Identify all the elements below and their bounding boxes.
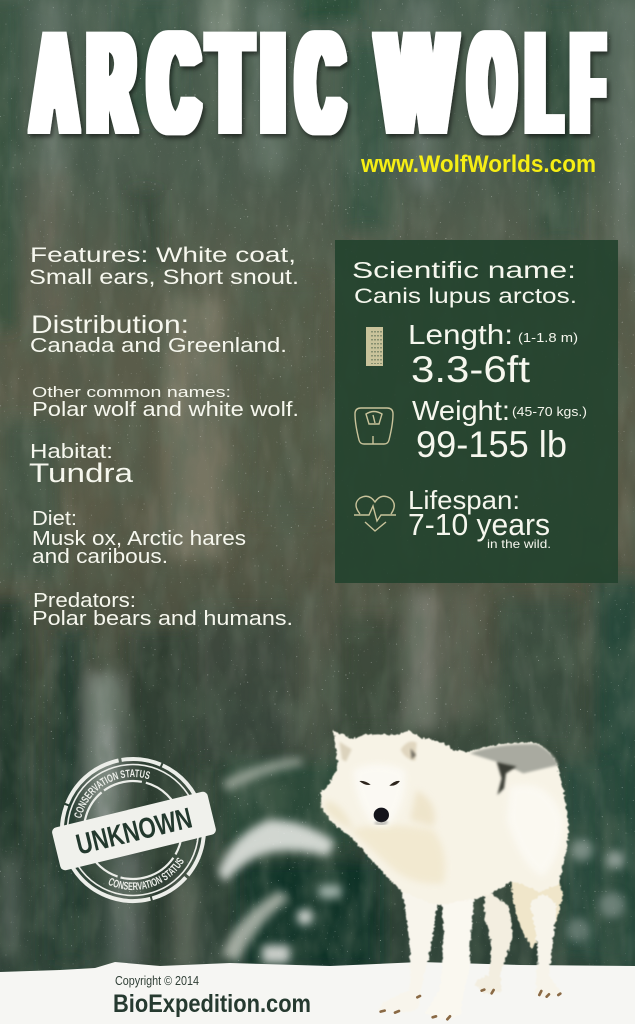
stamp rings and circular text: CONSERVATION STATUS xyxy=(74,769,150,818)
copyright credit xyxy=(113,973,311,1018)
wolf near legs xyxy=(379,890,439,1013)
wolf eyes xyxy=(359,781,371,785)
diet: Musk ox, Arctic hares xyxy=(32,528,246,550)
scientific name xyxy=(352,257,577,308)
grey back patch xyxy=(470,744,558,773)
wolf ears xyxy=(339,742,352,762)
weight xyxy=(412,395,587,465)
wolf face xyxy=(353,764,405,827)
title: W xyxy=(379,4,454,163)
icon: ruler xyxy=(366,327,383,366)
icon: scale xyxy=(355,408,393,444)
habitat: Habitat: xyxy=(30,441,113,463)
other common names: Polar wolf and white wolf. xyxy=(32,399,299,421)
facts column xyxy=(29,244,299,630)
predators: Predators: xyxy=(33,590,136,612)
title: R xyxy=(89,4,134,163)
diet: and caribous. xyxy=(32,546,168,568)
distribution: Distribution: xyxy=(31,311,189,339)
lifespan: Lifespan: xyxy=(408,485,520,515)
scientific name: Canis lupus arctos. xyxy=(354,285,577,308)
title: L xyxy=(528,4,560,163)
predators: Polar bears and humans. xyxy=(32,608,293,630)
other common names xyxy=(32,384,299,421)
wolf nose xyxy=(374,808,389,822)
weight: 99-155 lb xyxy=(416,424,567,465)
title: T xyxy=(210,4,250,163)
title: A xyxy=(33,4,76,163)
stamp banner: UNKNOWN xyxy=(73,802,195,861)
stamp rings and circular text xyxy=(60,757,206,904)
features xyxy=(29,244,299,289)
chest shading xyxy=(350,825,445,884)
scientific name: Scientific name: xyxy=(352,257,576,283)
arctic wolf illustration xyxy=(323,731,570,1021)
wolf body xyxy=(323,731,570,907)
distribution: Canada and Greenland. xyxy=(30,335,287,357)
title: I xyxy=(262,4,284,163)
habitat: Tundra xyxy=(29,458,134,488)
icon: heart rate xyxy=(354,496,396,531)
title: C xyxy=(150,4,198,163)
wolf far legs and tail xyxy=(476,890,514,995)
copyright credit: Copyright © 2014 xyxy=(115,973,199,988)
title: O xyxy=(470,4,514,163)
conservation status stamp xyxy=(52,757,216,904)
length: (1-1.8 m) xyxy=(518,330,578,345)
stamp rings and circular text: CONSERVATION STATUS xyxy=(108,858,184,890)
lifespan xyxy=(408,485,551,551)
copyright credit: BioExpedition.com xyxy=(113,990,311,1018)
features: Small ears, Short snout. xyxy=(29,266,299,289)
predators xyxy=(32,590,293,630)
wolf claws xyxy=(381,990,560,1019)
diet: Diet: xyxy=(32,508,77,530)
lifespan: 7-10 years xyxy=(408,507,550,542)
website url: www.WolfWorlds.com xyxy=(360,151,596,178)
length xyxy=(408,319,578,390)
other common names: Other common names: xyxy=(32,384,231,401)
distribution xyxy=(30,311,287,357)
features: Features: White coat, xyxy=(30,244,296,267)
length: Length: xyxy=(408,319,513,350)
weight: (45-70 kgs.) xyxy=(512,404,587,419)
title: C xyxy=(298,4,342,163)
lifespan: in the wild. xyxy=(487,537,551,551)
diet xyxy=(32,508,246,568)
length: 3.3-6ft xyxy=(411,349,531,390)
weight: Weight: xyxy=(412,395,510,426)
panel: key statistics xyxy=(335,240,618,583)
stamp banner xyxy=(51,791,217,871)
snow ground xyxy=(0,962,635,1024)
habitat xyxy=(29,441,134,488)
